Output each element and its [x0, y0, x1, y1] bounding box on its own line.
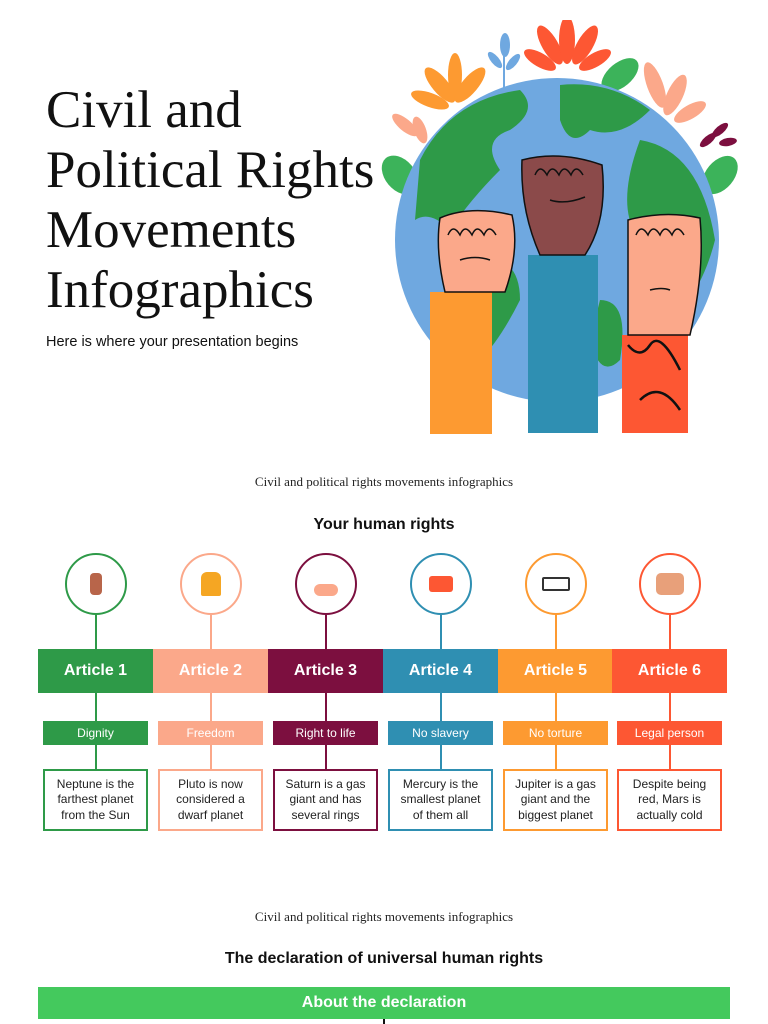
- right arm: [622, 335, 688, 433]
- column: article 5: [498, 553, 612, 831]
- heading: declaration: The declaration of universal human rights: [225, 950, 543, 967]
- column: article 2: Freedom: [186, 726, 235, 740]
- illustration: globe with raised fists: [382, 20, 738, 434]
- icon: speaker: [180, 553, 242, 615]
- column: article 3: Saturn is a gas giant and has several rings: [285, 777, 366, 822]
- title: Infographics: [46, 261, 314, 319]
- column: article 3: Right to life: [295, 726, 356, 740]
- heading: your human rights: Your human rights: [313, 516, 455, 533]
- title: [46, 81, 374, 319]
- column: article 6: [612, 553, 727, 831]
- column: article 6: Despite being red, Mars is actually cold: [633, 777, 706, 822]
- icon: hand: [295, 553, 357, 615]
- column: article 3: Article 3: [294, 662, 357, 679]
- column: article 1: Dignity: [77, 726, 114, 740]
- column: article 2: Pluto is now considered a dwarf planet: [176, 777, 245, 822]
- banner: about the declaration: About the declaration: [302, 994, 466, 1011]
- column: article 3: [268, 553, 383, 831]
- column: article 2: [153, 553, 268, 831]
- section caption 1: Civil and political rights movements infographics: [255, 474, 513, 489]
- column: article 4: [383, 553, 498, 831]
- icon: fists: [639, 553, 701, 615]
- title: Movements: [46, 201, 296, 259]
- icon: fist: [65, 553, 127, 615]
- column: article 1: [38, 553, 153, 831]
- column: article 6: Article 6: [638, 662, 701, 679]
- subtitle: Here is where your presentation begins: [46, 334, 298, 350]
- column: article 6: Legal person: [635, 726, 704, 740]
- left arm: [430, 292, 492, 434]
- icon: protest sign: [525, 553, 587, 615]
- banner: about the declaration: [38, 987, 730, 1019]
- title: Political Rights: [46, 141, 374, 199]
- column: article 4: No slavery: [412, 726, 469, 740]
- icon: megaphone: [410, 553, 472, 615]
- section caption 2: Civil and political rights movements infographics: [255, 909, 513, 924]
- column: article 4: Article 4: [409, 662, 472, 679]
- column: article 2: Article 2: [179, 662, 242, 679]
- column: article 5: Article 5: [524, 662, 587, 679]
- column: article 1: Neptune is the farthest planet from the Sun: [57, 777, 134, 822]
- column: article 4: Mercury is the smallest planet of them all: [400, 777, 481, 822]
- center arm: [528, 255, 598, 433]
- column: article 1: Article 1: [64, 662, 127, 679]
- globe: [395, 78, 719, 402]
- flowers: [409, 53, 490, 113]
- column: article 5: No torture: [529, 726, 582, 740]
- column: article 5: Jupiter is a gas giant and the biggest planet: [515, 777, 596, 822]
- title: Civil and: [46, 81, 242, 139]
